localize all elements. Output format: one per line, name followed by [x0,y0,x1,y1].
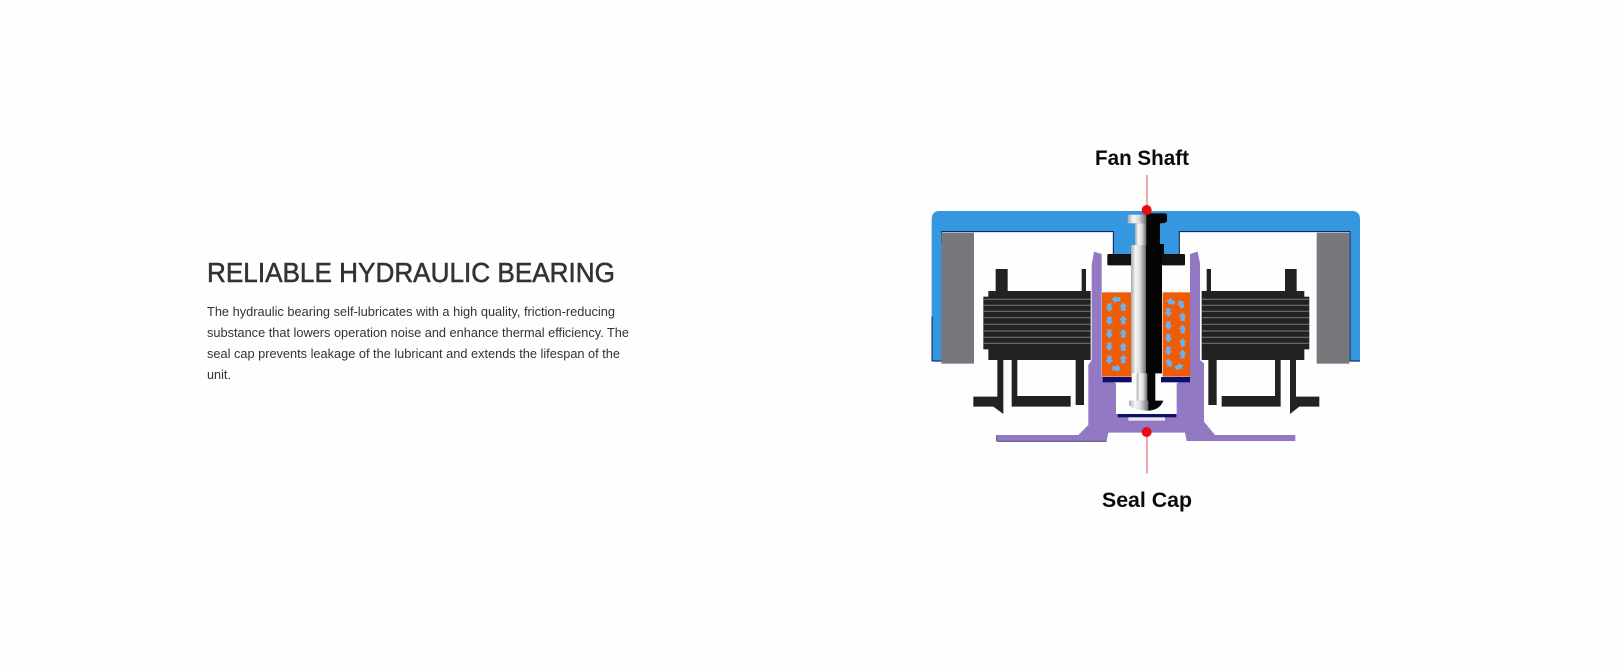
description paragraph: seal cap prevents leakage of the lubricant and extends the lifespan of the [207,346,620,361]
sleeve dark edge [997,435,1107,441]
magnets (gray) [941,233,1349,364]
purple bearing sleeve and base [997,252,1295,441]
shaft silver side [1128,215,1148,411]
diagram: hydraulic bearing cross-section [932,175,1360,474]
description paragraph: substance that lowers operation noise and enhance thermal efficiency. The [207,325,629,340]
description paragraph [207,304,629,382]
fan shaft [1128,213,1167,411]
label: Seal Cap: Seal Cap [1102,489,1192,512]
red pointer: seal cap [1142,427,1152,474]
right coil [1202,269,1319,414]
fan cap (blue housing) [932,211,1360,362]
oil flow arrows [1105,295,1187,372]
label: Fan Shaft: Fan Shaft [1095,147,1189,170]
left coil [973,269,1091,414]
collar (black) [1107,254,1185,265]
shaft black side [1145,213,1167,411]
oil reservoir right [1163,292,1190,377]
heading: RELIABLE HYDRAULIC BEARING [207,257,615,288]
red pointer: fan shaft [1142,175,1152,215]
white area inside sleeve [1117,383,1176,414]
text block: heading and description [207,257,629,382]
seals (navy) [1103,377,1190,417]
description paragraph: The hydraulic bearing self-lubricates with a high quality, friction-reducing [207,304,615,319]
stator coils and frames [973,269,1319,414]
description paragraph: unit. [207,367,231,382]
coil winding stripes [983,299,1309,343]
white bushing gap [1128,417,1165,421]
oil reservoir left [1102,292,1132,377]
